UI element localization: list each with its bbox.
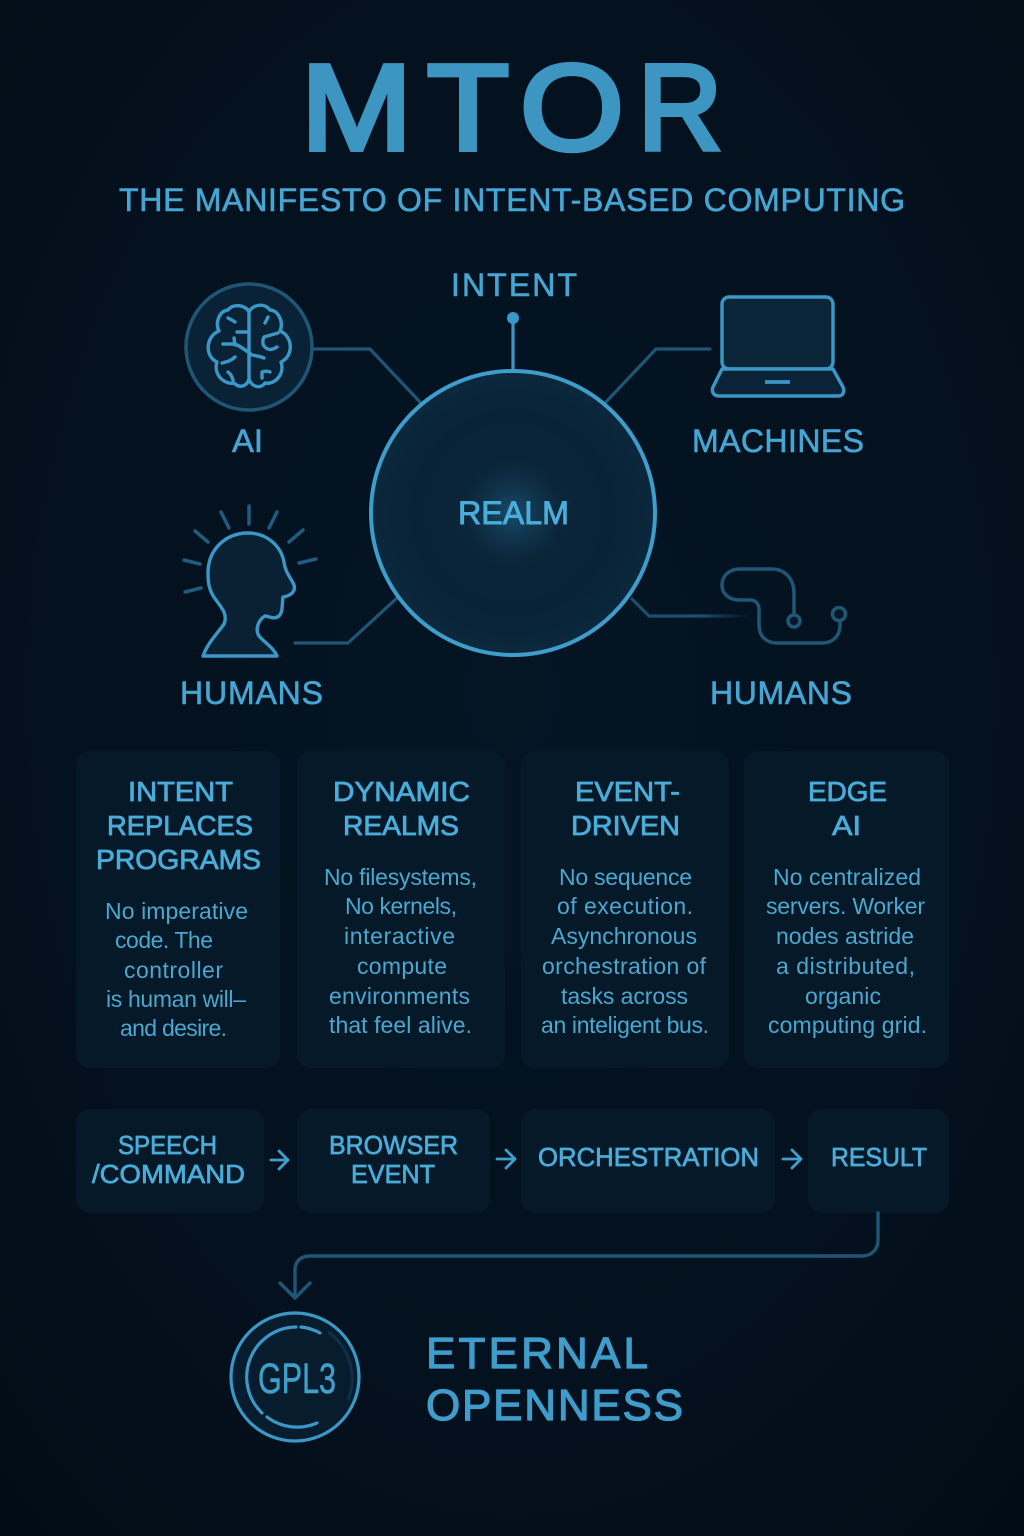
icon: GPL3 badge xyxy=(231,1313,359,1441)
body text: tasks across xyxy=(561,983,688,1009)
connector: AI to realm xyxy=(313,349,420,402)
title: T xyxy=(427,40,509,176)
body text: and desire. xyxy=(120,1015,227,1041)
closing statement: eternal openness: OPENNESS xyxy=(426,1381,683,1430)
panel: intent replaces programs xyxy=(76,751,280,1068)
heading: PROGRAMS xyxy=(96,844,261,875)
icon: GPL3 badge: GPL3 xyxy=(258,1355,336,1403)
connector: circuit to realm xyxy=(631,598,748,616)
machines label: MACHINES xyxy=(692,423,864,459)
body text: No kernels, xyxy=(345,893,457,919)
connector: humans to realm xyxy=(295,598,397,643)
body text: organic xyxy=(805,983,881,1009)
icon: AI brain xyxy=(186,284,312,410)
heading: DYNAMIC xyxy=(333,776,470,807)
subtitle: THE MANIFESTO OF INTENT-BASED COMPUTING xyxy=(119,182,905,218)
body text: of execution. xyxy=(557,893,693,919)
flow step: browser event xyxy=(297,1109,490,1213)
body text: compute xyxy=(357,953,447,979)
panel: dynamic realms xyxy=(297,751,505,1068)
heading xyxy=(571,776,680,841)
heading xyxy=(96,776,261,875)
flow step: speech command: SPEECH xyxy=(118,1130,217,1160)
arrow: browser to orchestration xyxy=(497,1150,515,1168)
heading xyxy=(808,776,887,841)
flow step: result xyxy=(808,1109,949,1213)
body text: code. The xyxy=(115,927,213,953)
icon: circuit trace xyxy=(722,569,846,643)
title xyxy=(301,40,722,176)
arrow: speech to browser xyxy=(271,1151,288,1169)
body text xyxy=(324,864,477,1038)
body text: computing grid. xyxy=(768,1012,927,1038)
panel: edge AI xyxy=(744,751,949,1068)
body text: servers. Worker xyxy=(766,893,925,919)
body text: orchestration of xyxy=(542,953,707,979)
heading: DRIVEN xyxy=(571,810,680,841)
humans label right: HUMANS xyxy=(710,675,852,711)
AI label: AI xyxy=(232,423,263,459)
intent label: INTENT xyxy=(451,267,577,303)
arrow: result to GPL3 xyxy=(280,1213,878,1298)
body text: Asynchronous xyxy=(551,923,697,949)
title: M xyxy=(301,40,412,176)
flow step: browser event: BROWSER xyxy=(329,1130,458,1160)
body text: interactive xyxy=(344,923,455,949)
realm circle xyxy=(371,371,655,655)
icon: laptop xyxy=(712,297,844,396)
title: R xyxy=(638,40,722,176)
connector: machines to realm xyxy=(606,349,710,402)
flow step: orchestration xyxy=(521,1109,775,1213)
body text: nodes astride xyxy=(776,923,914,949)
body text: an inteligent bus. xyxy=(541,1012,709,1038)
humans label left: HUMANS xyxy=(180,675,323,711)
heading: AI xyxy=(832,810,861,841)
flow step: result: RESULT xyxy=(831,1142,927,1172)
title: O xyxy=(520,40,624,176)
heading xyxy=(333,776,470,841)
body text: No filesystems, xyxy=(324,864,477,890)
heading: REALMS xyxy=(343,810,459,841)
body text: No centralized xyxy=(773,864,921,890)
body text xyxy=(541,864,709,1038)
heading: EDGE xyxy=(808,776,887,807)
body text: No imperative xyxy=(105,898,248,924)
body text: No sequence xyxy=(559,864,692,890)
closing statement: eternal openness: ETERNAL xyxy=(426,1329,648,1378)
icon: human head with rays xyxy=(184,506,316,656)
flow step: browser event: EVENT xyxy=(351,1159,435,1189)
panel: event-driven xyxy=(521,751,729,1068)
arrow: orchestration to result xyxy=(783,1150,801,1168)
flow step: speech command xyxy=(76,1109,264,1213)
closing statement: eternal openness xyxy=(426,1329,683,1430)
realm label: REALM xyxy=(458,495,569,531)
heading: REPLACES xyxy=(107,810,253,841)
body text: is human will– xyxy=(106,986,246,1012)
body text: a distributed, xyxy=(776,953,915,979)
body text xyxy=(766,864,927,1038)
diagram: realm hub and connected actors xyxy=(180,267,864,711)
body text: controller xyxy=(124,957,223,983)
flow step: orchestration: ORCHESTRATION xyxy=(538,1142,759,1172)
heading: EVENT- xyxy=(575,776,680,807)
connector: intent to realm xyxy=(507,312,519,372)
flow step: speech command: /COMMAND xyxy=(92,1159,245,1189)
body text: that feel alive. xyxy=(329,1012,472,1038)
body text xyxy=(105,898,248,1041)
body text: environments xyxy=(329,983,470,1009)
heading: INTENT xyxy=(128,776,233,807)
